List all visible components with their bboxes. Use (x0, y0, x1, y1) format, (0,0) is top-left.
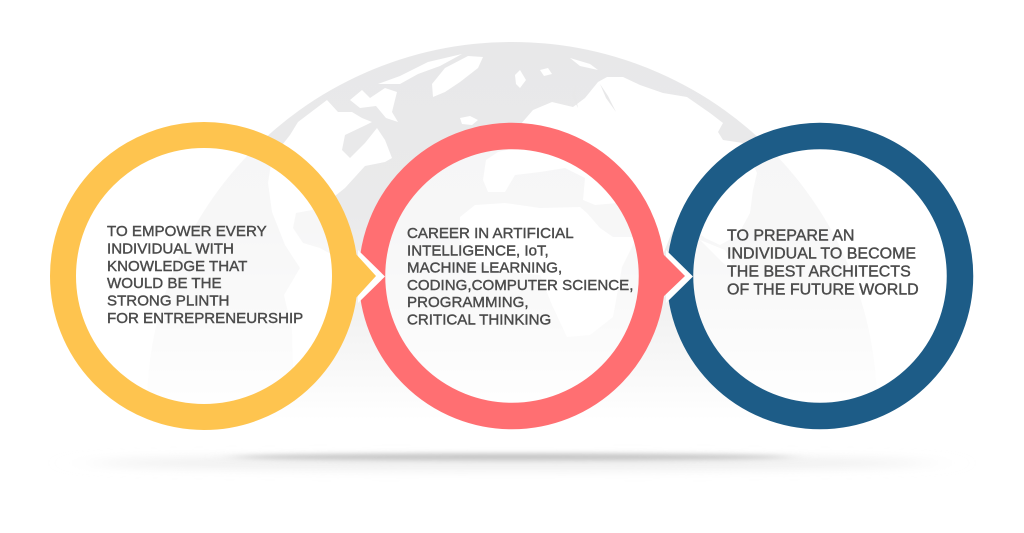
text block: blue circle: OF THE FUTURE WORLD (727, 282, 919, 298)
globe background (207, 42, 818, 356)
text block: red circle: INTELLIGENCE, IoT, (407, 242, 549, 259)
text block: yellow circle: INDIVIDUAL WITH (107, 240, 234, 257)
text block: red circle: MACHINE LEARNING, (407, 260, 562, 277)
arrow: yellow to red (340, 253, 376, 299)
text block: yellow circle: TO EMPOWER EVERY (107, 223, 267, 240)
ground shadow (92, 454, 932, 470)
text block: red circle: CODING,COMPUTER SCIENCE, (407, 277, 633, 294)
text block: blue circle: TO PREPARE AN (727, 228, 854, 244)
text block: yellow circle: KNOWLEDGE THAT (107, 258, 247, 275)
text block: yellow circle: STRONG PLINTH (107, 293, 229, 310)
text block: blue circle: INDIVIDUAL TO BECOME (727, 246, 916, 262)
text block: red circle: PROGRAMMING, (407, 294, 529, 311)
arrow: red to blue (648, 253, 685, 298)
text block: yellow circle: WOULD BE THE (107, 275, 222, 292)
text block: red circle: CAREER IN ARTIFICIAL (407, 225, 573, 242)
panel: blue circle (666, 136, 960, 416)
panel: yellow circle (63, 135, 345, 417)
panel: red circle (358, 136, 652, 416)
text block: blue circle: THE BEST ARCHITECTS (727, 264, 911, 280)
text block: yellow circle: FOR ENTREPRENEURSHIP (107, 310, 303, 327)
text block: red circle: CRITICAL THINKING (407, 312, 551, 328)
circle interiors (76, 148, 948, 404)
